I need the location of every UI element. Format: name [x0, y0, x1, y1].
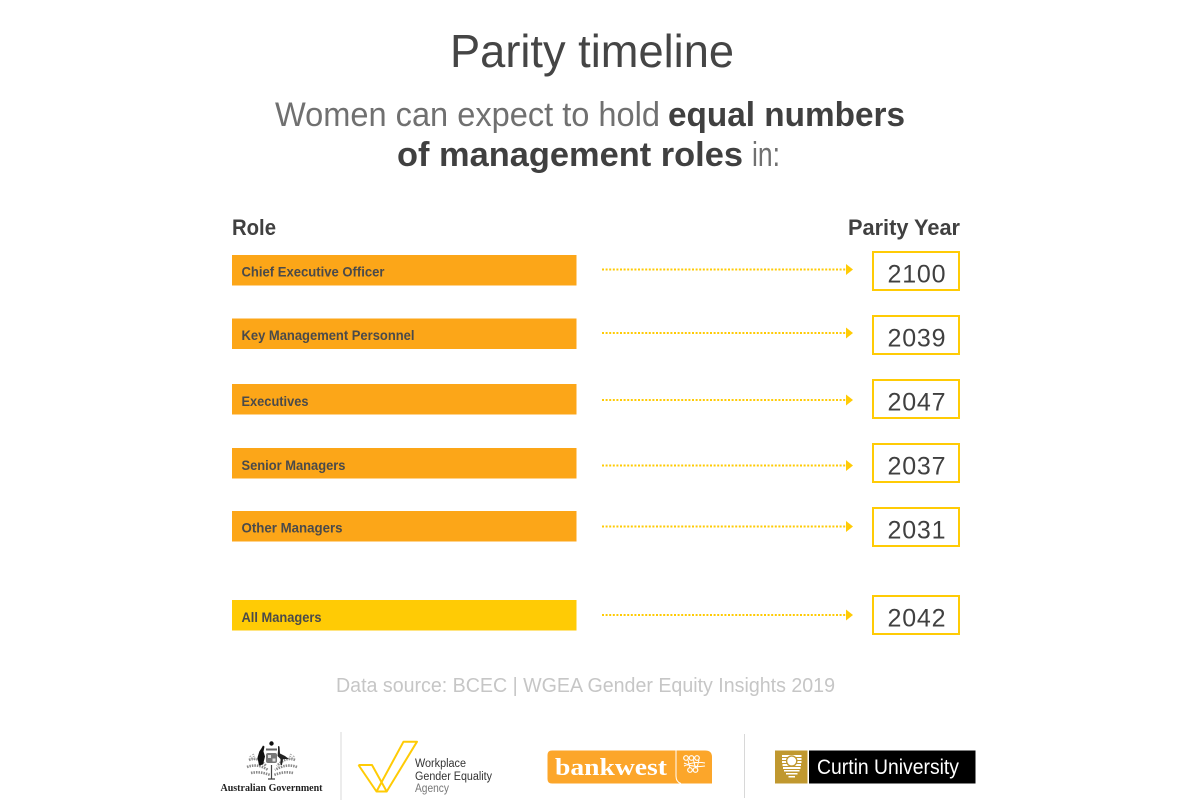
- row: Key Management Personnel: [232, 316, 959, 354]
- logo: Curtin University: [775, 750, 976, 784]
- column heading: parity year: Parity Year: [848, 215, 960, 240]
- logo: Australian Government: [220, 741, 323, 794]
- divider: [340, 732, 342, 800]
- row: Executives: 2047: [888, 388, 946, 416]
- row: Key Management Personnel: Key Management Personnel: [242, 327, 414, 343]
- row: Other Managers: 2031: [888, 516, 946, 544]
- row: All Managers: [232, 596, 959, 634]
- row: Senior Managers: Senior Managers: [242, 457, 346, 473]
- logo: Bankwest: bankwest: [555, 755, 667, 781]
- logo: Australian Government: Australian Government: [220, 783, 323, 794]
- icon: Curtin crest: [782, 755, 802, 778]
- title: Parity timeline: [450, 25, 734, 77]
- logo: Workplace Gender Equality Agency: Agency: [415, 783, 449, 795]
- icon: bankwest emblem: [684, 756, 705, 772]
- row: Other Managers: [232, 508, 959, 546]
- row: Chief Executive Officer: [232, 252, 959, 290]
- row: Chief Executive Officer: 2100: [888, 260, 946, 288]
- row: All Managers: All Managers: [242, 609, 322, 625]
- column heading: role: Role: [232, 215, 276, 240]
- icon: check mark: [358, 742, 417, 792]
- subtitle: of management roles: [397, 136, 743, 174]
- icon: coat of arms: [247, 741, 297, 779]
- subtitle: [275, 96, 905, 174]
- row: Chief Executive Officer: Chief Executive Officer: [242, 264, 385, 280]
- subtitle: in:: [752, 136, 780, 174]
- row: Executives: [232, 380, 959, 418]
- divider: [744, 734, 746, 798]
- logo: Workplace Gender Equality Agency: [358, 742, 492, 795]
- row: Other Managers: Other Managers: [242, 520, 343, 536]
- row: All Managers: 2042: [888, 604, 946, 632]
- logo: Bankwest: [548, 750, 712, 784]
- logo: Workplace Gender Equality Agency: Gender Equality: [415, 771, 492, 783]
- logo: Curtin University: Curtin University: [817, 756, 959, 779]
- subtitle: Women can expect to hold: [275, 96, 660, 134]
- subtitle: equal numbers: [668, 96, 905, 134]
- data source: Data source: BCEC | WGEA Gender Equity Insights 2019: [336, 675, 835, 697]
- row: Senior Managers: [232, 444, 959, 482]
- row: Senior Managers: 2037: [888, 452, 946, 480]
- row: Key Management Personnel: 2039: [888, 324, 946, 352]
- row: Executives: Executives: [242, 393, 309, 409]
- logo: Workplace Gender Equality Agency: Workplace: [415, 758, 466, 770]
